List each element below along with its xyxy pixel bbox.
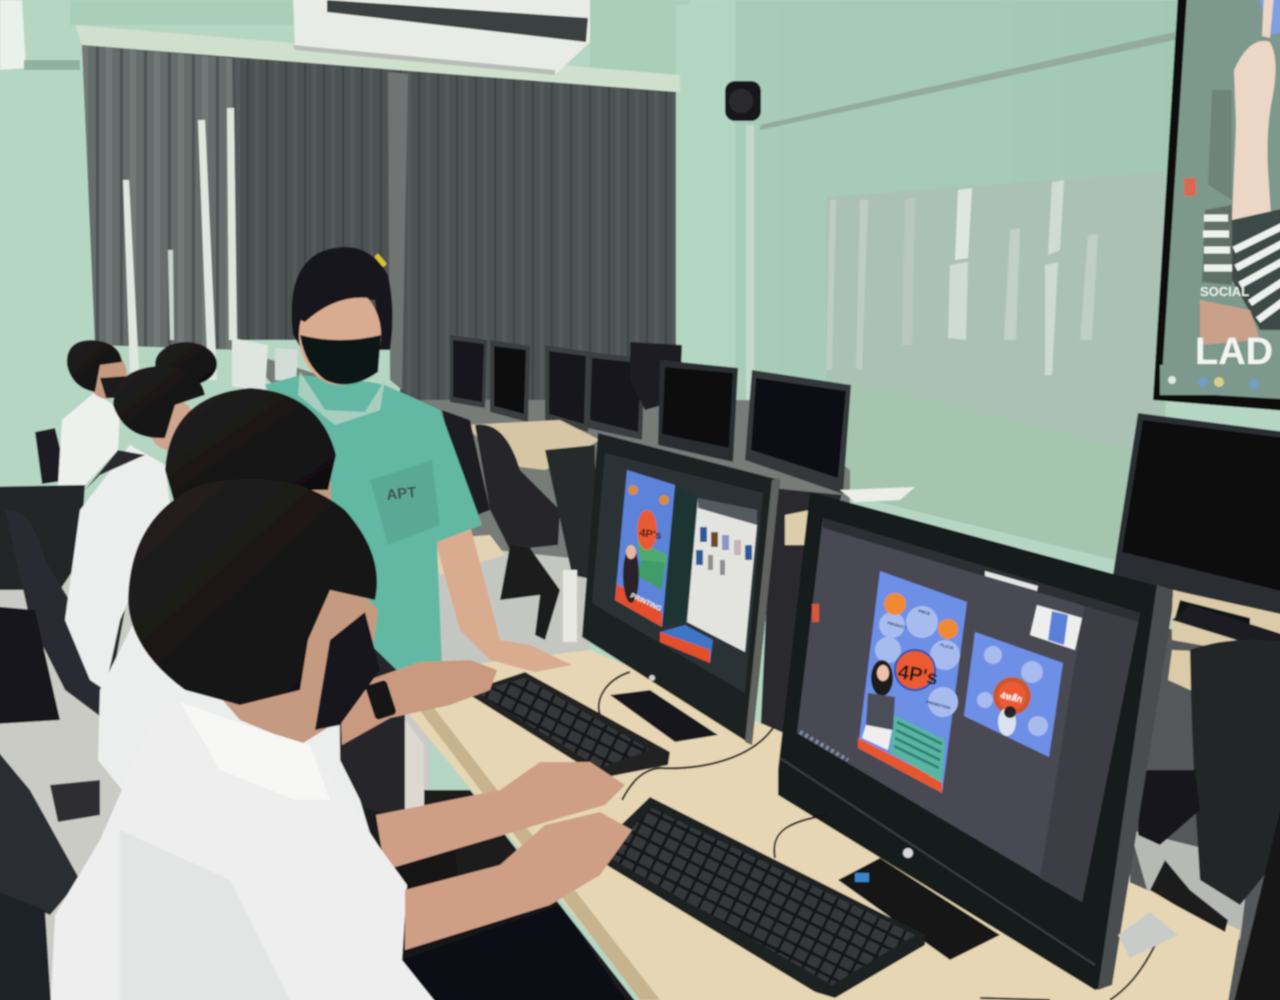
whiteboard bbox=[826, 172, 1165, 455]
third student bbox=[65, 366, 205, 690]
monitor base sticker bbox=[855, 873, 869, 882]
file window bbox=[687, 498, 757, 652]
poster continuation bbox=[660, 625, 713, 663]
poster on screen bbox=[615, 470, 675, 627]
desk cables bbox=[599, 672, 1178, 1000]
poster 4P's on screen: PRICE bbox=[918, 608, 931, 616]
hp logo bbox=[903, 848, 913, 858]
neck and face bbox=[170, 560, 378, 745]
floor bbox=[0, 540, 1250, 1000]
woman on poster bbox=[862, 660, 895, 750]
back row monitors bbox=[232, 335, 851, 494]
screen panel bbox=[662, 485, 698, 627]
poster 4P's on screen bbox=[858, 571, 967, 793]
hp logo bbox=[649, 675, 655, 681]
shirt bbox=[98, 480, 375, 850]
left background chairs bbox=[0, 428, 125, 1000]
back keyboard bbox=[465, 672, 670, 778]
poster 4P's on screen: 4P's bbox=[896, 661, 940, 690]
left forearm bbox=[340, 660, 497, 745]
white shirt bbox=[50, 702, 450, 1000]
room behind the desks bbox=[240, 350, 1280, 1000]
poster 4P's on screen: PRODUCT bbox=[887, 620, 908, 630]
main desk bbox=[392, 650, 1240, 1000]
wristwatch bbox=[365, 679, 397, 721]
far student two bbox=[155, 342, 217, 386]
projection screen: LAD bbox=[1195, 331, 1273, 373]
selection bar bbox=[985, 571, 1038, 591]
shirt logo: APT bbox=[386, 484, 417, 504]
right background monitor bbox=[1113, 413, 1280, 690]
students at far left bbox=[58, 340, 217, 690]
teacher right arm and hand bbox=[432, 525, 572, 672]
poster on screen: 4P's bbox=[639, 527, 662, 542]
middle student bbox=[98, 388, 640, 1000]
poster on screen: PRINTING bbox=[629, 592, 663, 613]
second artboard on screen: 4หลัก bbox=[1000, 690, 1023, 705]
monitor stand bbox=[610, 690, 718, 742]
second artboard on screen bbox=[964, 632, 1063, 757]
projected swatch bbox=[1184, 178, 1196, 196]
app panels bbox=[1040, 600, 1140, 902]
teacher bbox=[265, 247, 572, 820]
front trousers bbox=[402, 905, 640, 1000]
black face mask bbox=[300, 335, 381, 384]
poster 4P's on screen: PROMOTION bbox=[926, 699, 951, 710]
right forearm and hand bbox=[376, 762, 625, 870]
projection screen bbox=[1153, 0, 1280, 412]
teacher face bbox=[299, 285, 381, 385]
front student bbox=[50, 479, 640, 1000]
wall speaker bbox=[725, 81, 761, 121]
tool swatch bbox=[812, 604, 819, 622]
arm and hand bbox=[405, 812, 632, 950]
projected poster text: SOCIAL bbox=[1200, 284, 1249, 299]
front keyboard bbox=[590, 797, 925, 998]
right-side chairs bbox=[1138, 640, 1280, 1000]
teal polo shirt bbox=[265, 375, 482, 678]
vertical blinds bbox=[82, 45, 676, 400]
back chairs bbox=[442, 410, 595, 642]
poster 4P's on screen: PLACE bbox=[940, 642, 954, 651]
teacher trousers bbox=[340, 610, 405, 820]
under-arm trousers bbox=[378, 850, 458, 890]
projected striped sleeve bbox=[1202, 0, 1280, 330]
big monitor with poster on screen bbox=[778, 492, 1173, 990]
back desk bbox=[420, 420, 915, 575]
second monitor with poster on screen bbox=[582, 433, 780, 745]
navigator thumbnail bbox=[1030, 605, 1082, 650]
hair bbox=[165, 388, 336, 505]
taskbar icons bbox=[800, 732, 848, 760]
hair bbox=[128, 479, 377, 705]
air conditioner bbox=[293, 0, 590, 75]
teacher hair bbox=[292, 247, 393, 350]
trousers bbox=[400, 880, 640, 1000]
neck bbox=[190, 465, 335, 620]
far student bbox=[58, 340, 127, 485]
black mask bbox=[315, 612, 380, 730]
